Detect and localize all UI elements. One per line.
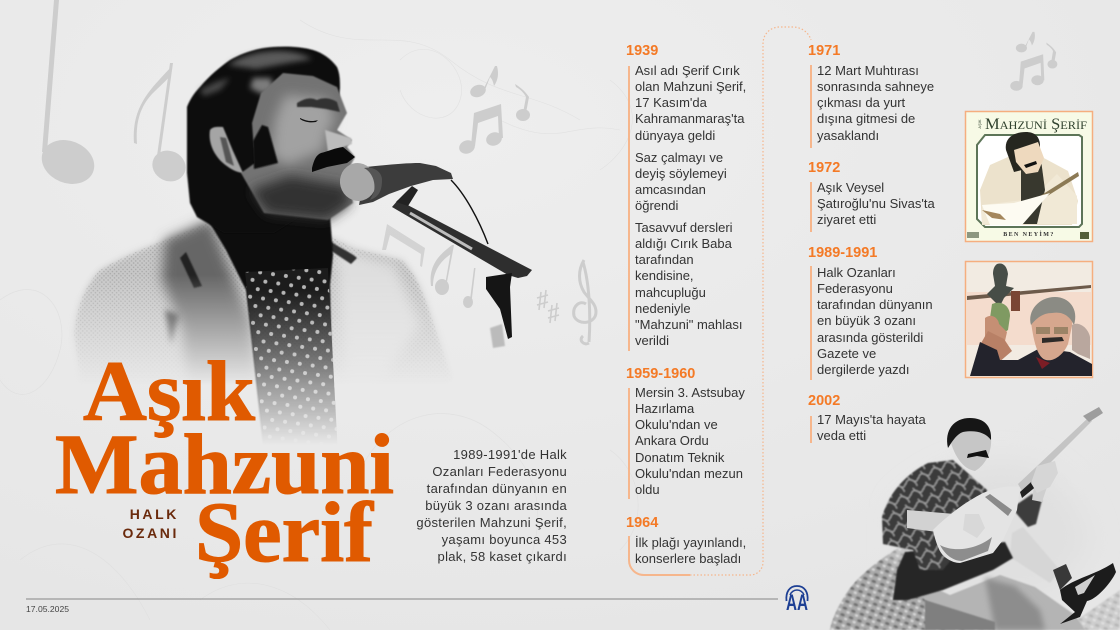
text 1971: dışına gitmesi de [817, 111, 915, 126]
year 1939: 1939 [626, 43, 658, 59]
text 1939 part 2 [635, 150, 727, 213]
summary paragraph: gösterilen Mahzuni Şerif, [416, 515, 567, 530]
face [241, 73, 355, 220]
sock and boot [1053, 564, 1072, 590]
subtitle: Halk Ozanı [122, 506, 179, 541]
summary paragraph: Ozanları Federasyonu [432, 464, 567, 479]
text 1989-1991: dergilerde yazdı [817, 362, 910, 377]
saz body [933, 486, 1020, 563]
text 1972: Şatıroğlu'nu Sivas'ta [817, 196, 935, 211]
text 1989-1991: Federasyonu [817, 281, 893, 296]
text 1989-1991: arasında gösterildi [817, 330, 923, 345]
text 1989-1991: Halk Ozanları [817, 265, 896, 280]
text 1939 part 1: dünyaya geldi [635, 128, 715, 143]
text 1939 part 3: tarafından [635, 252, 694, 267]
summary paragraph: tarafından dünyanın en [427, 481, 567, 496]
album cover image: AŞIK [977, 119, 982, 129]
text 1939 part 3: verildi [635, 333, 669, 348]
icon: sharps [537, 290, 559, 323]
text 1989-1991: en büyük 3 ozanı [817, 313, 916, 328]
summary paragraph: büyük 3 ozanı arasında [425, 498, 567, 513]
title line: Mahzuni: Mahzuni [55, 416, 394, 512]
text 1939 part 2: Saz çalmayı ve [635, 150, 723, 165]
trousers [910, 575, 1085, 630]
subtitle: Halk Ozanı: HALK [130, 506, 179, 522]
text 2002: veda etti [817, 428, 866, 443]
year 2002: 2002 [808, 393, 840, 409]
hands [1031, 461, 1058, 493]
dark collar and shirt [210, 216, 334, 440]
text 1971: sonrasında sahneye [817, 79, 934, 94]
text 1939 part 1 [635, 63, 746, 143]
icon: treble clef [574, 260, 596, 344]
year 1989-1991: 1989-1991 [808, 245, 877, 261]
text 1939 part 1: olan Mahzuni Şerif, [635, 79, 746, 94]
saz neck [1018, 418, 1092, 491]
text 1939 part 2: öğrendi [635, 198, 678, 213]
dotted tie pattern [245, 268, 338, 455]
date: 17.05.2025 [26, 604, 69, 614]
icon: second note [134, 63, 191, 187]
year 1972: 1972 [808, 160, 840, 176]
text 1939 part 3: kendisine, [635, 268, 694, 283]
text 1959-1960: Donatım Teknik [635, 450, 724, 465]
icon: big note [35, 0, 101, 192]
summary paragraph: 1989-1991'de Halk [453, 447, 567, 462]
trophy [987, 263, 1014, 304]
text 1939 part 3: mahcupluğu [635, 285, 706, 300]
soft halftone haze [900, 464, 1090, 595]
arm [907, 510, 983, 538]
timeline border [629, 27, 811, 575]
text 1989-1991: tarafından dünyanın [817, 297, 933, 312]
ear and sideburn [210, 127, 243, 173]
bottom rule [26, 598, 778, 600]
text 1959-1960: Okulu'ndan ve [635, 417, 718, 432]
text 1972 [817, 180, 935, 227]
dark seat [893, 542, 1013, 600]
text 1959-1960: Mersin 3. Astsubay [635, 385, 745, 400]
text 2002 [817, 412, 926, 443]
text 1971: 12 Mart Muhtırası [817, 63, 919, 78]
text 1964: İlk plağı yayınlandı, [635, 535, 746, 550]
subtitle: Halk Ozanı: OZANI [122, 525, 179, 541]
text 1939 part 3: aldığı Cırık Baba [635, 236, 732, 251]
music notes behind portrait [35, 0, 1057, 344]
forearm and sleeve [1016, 494, 1042, 527]
album cover image: BEN NEYİM? [1003, 231, 1055, 238]
icon: top right notes [1010, 32, 1057, 91]
text 1971: yasaklandı [817, 128, 879, 143]
text 1939 part 3 [635, 220, 742, 348]
text 1964: konserlere başladı [635, 551, 741, 566]
text 1959-1960: Okulu'ndan mezun [635, 466, 743, 481]
year 1971: 1971 [808, 43, 840, 59]
album cover image: MAHZUNİ ŞERİF [985, 116, 1087, 133]
title line: Aşık: Aşık [83, 343, 255, 439]
man with trophy [970, 342, 1092, 376]
icon: note cluster [457, 66, 530, 156]
text 1964 [635, 535, 746, 566]
title line: Şerif: Şerif [195, 484, 374, 580]
year 1959-1960: 1959-1960 [626, 366, 695, 382]
microphone and stand [336, 159, 532, 348]
album cover image [966, 112, 1092, 242]
summary paragraph: plak, 58 kaset çıkardı [438, 549, 567, 564]
text 1959-1960: oldu [635, 482, 660, 497]
AA logo [786, 586, 808, 615]
jacket lapel shading [154, 216, 254, 376]
text 1939 part 2: amcasından [635, 182, 706, 197]
summary paragraph: yaşamı boyunca 453 [442, 532, 567, 547]
text 1959-1960: Ankara Ordu [635, 433, 709, 448]
moustache, eye, eyebrow [312, 147, 355, 172]
text 1959-1960: Hazırlama [635, 401, 694, 416]
bottom right photo with saz [830, 407, 1120, 630]
text 1971 [817, 63, 934, 143]
text 1939 part 3: nedeniyle [635, 301, 691, 316]
title [55, 343, 394, 580]
icon: notes by microphone [382, 224, 476, 308]
text 1972: Aşık Veysel [817, 180, 884, 195]
text 1989-1991: Gazete ve [817, 346, 876, 361]
text 1939 part 3: "Mahzuni" mahlası [635, 317, 742, 332]
hair and head silhouette [187, 47, 340, 233]
timeline bars [628, 65, 812, 499]
text 1959-1960 [635, 385, 745, 497]
portrait photo of Mahzuni Şerif singing [74, 47, 452, 455]
text 1971: çıkması da yurt [817, 95, 905, 110]
year 1964: 1964 [626, 515, 658, 531]
award photo [966, 262, 1092, 378]
text 1939 part 1: Asıl adı Şerif Cırık [635, 63, 740, 78]
text 1939 part 1: 17 Kasım'da [635, 95, 707, 110]
rock [830, 543, 1120, 630]
text 1939 part 3: Tasavvuf dersleri [635, 220, 733, 235]
text 2002: 17 Mayıs'ta hayata [817, 412, 926, 427]
head [950, 420, 991, 471]
text 1939 part 1: Kahramanmaraş'ta [635, 111, 744, 126]
AA logo: AA [786, 590, 808, 615]
summary paragraph [416, 447, 567, 564]
text 1972: ziyaret etti [817, 212, 876, 227]
text 1939 part 2: deyiş söylemeyi [635, 166, 727, 181]
shirt [882, 460, 987, 570]
text 1989-1991 [817, 265, 933, 377]
jacket [74, 216, 448, 378]
